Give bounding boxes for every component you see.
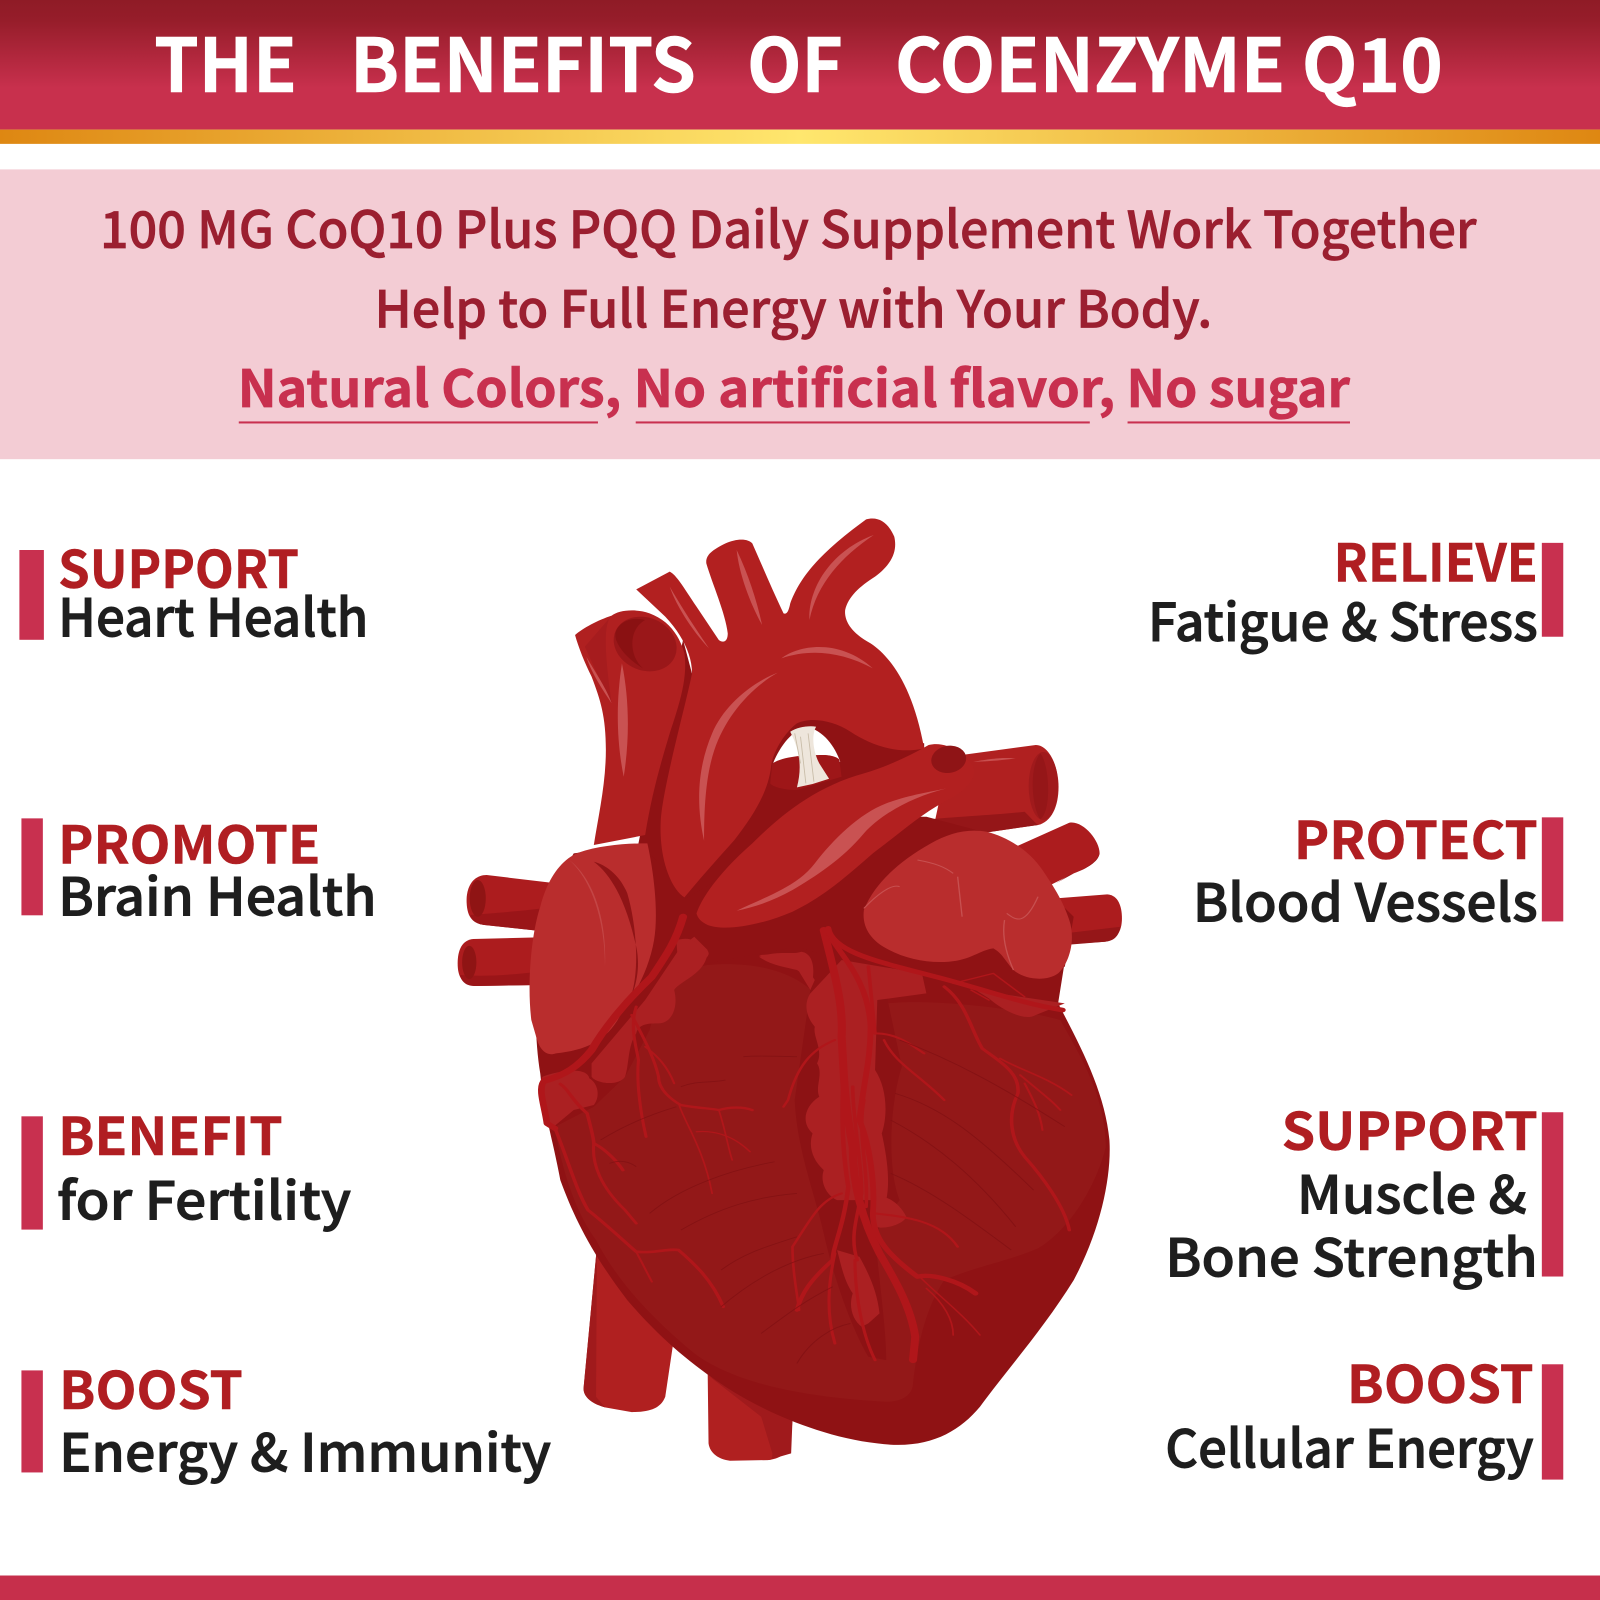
benefit: boost cellular energy: BOOST [1347, 1343, 1534, 1418]
panel: intro text [0, 169, 1600, 459]
right coronary artery [541, 917, 752, 1307]
inferior vena cava [584, 1247, 674, 1412]
left pulmonary veins [458, 875, 551, 986]
icon: anatomical heart [458, 519, 1122, 1461]
benefit: support muscle and bone strength: Muscle & [1297, 1153, 1527, 1228]
benefit: boost energy and immunity: BOOST [59, 1349, 243, 1424]
left coronary artery [828, 928, 1071, 1230]
benefit: relieve fatigue and stress: RELIEVE [1334, 522, 1538, 597]
benefit: support muscle and bone strength [1165, 1090, 1563, 1292]
benefit: protect blood vessels: PROTECT [1294, 799, 1538, 874]
benefit: boost cellular energy: Cellular Energy [1165, 1407, 1534, 1482]
claims line with underlines: Natural Colors, [238, 348, 621, 422]
benefit: protect blood vessels [1193, 799, 1563, 936]
claims line with underlines [238, 348, 1351, 423]
benefit: support heart health [19, 528, 368, 652]
claims line with underlines: No artificial flavor, [634, 348, 1115, 422]
claims line with underlines: No sugar [1127, 348, 1351, 422]
left atrium [864, 831, 1072, 979]
ventricle muscle panel [555, 964, 1106, 1402]
title: THE [154, 7, 297, 114]
benefit: support muscle and bone strength: SUPPORT [1282, 1090, 1538, 1165]
white gap under the aortic arch [772, 727, 840, 765]
benefit: boost energy and immunity [21, 1349, 551, 1486]
intro line 2: Help to Full Energy with Your Body. [374, 269, 1212, 343]
benefit: promote brain health [21, 803, 377, 930]
fat near top centre [676, 939, 813, 980]
benefit: boost cellular energy [1165, 1343, 1563, 1482]
dark back panel around arch [638, 640, 924, 900]
benefit: support heart health: SUPPORT [58, 528, 299, 603]
aortic arch and branches [636, 519, 924, 897]
benefit: boost energy and immunity: Energy & Immunity [59, 1411, 551, 1486]
title: OF [747, 7, 843, 114]
right atrium [530, 843, 656, 1054]
title: COENZYME Q10 [895, 7, 1443, 114]
ventricle body [535, 877, 1110, 1445]
descending aorta [708, 1370, 792, 1461]
benefit: relieve fatigue and stress [1148, 522, 1563, 656]
benefit: promote brain health: Brain Health [58, 855, 377, 930]
pulmonary artery behind [770, 755, 842, 790]
septum groove shadow [795, 990, 902, 1360]
benefit: protect blood vessels: Blood Vessels [1193, 861, 1538, 936]
title: BENEFITS [350, 7, 696, 114]
footer bar [0, 1576, 1600, 1600]
pulmonary trunk [696, 741, 974, 928]
right pulmonary vessels [924, 745, 1122, 945]
benefit: benefit for fertility: for Fertility [57, 1159, 351, 1234]
benefit: promote brain health: PROMOTE [58, 803, 320, 878]
ligament [790, 726, 829, 787]
superior vena cava [575, 610, 687, 845]
benefit: support heart health: Heart Health [58, 577, 368, 652]
intro line 1: 100 MG CoQ10 Plus PQQ Daily Supplement Work Together [100, 189, 1477, 263]
benefit: benefit for fertility [21, 1095, 351, 1234]
fat deposits [540, 937, 1065, 1327]
dark upper base [542, 817, 1074, 1000]
benefit: support muscle and bone strength: Bone Strength [1165, 1217, 1538, 1292]
benefit: relieve fatigue and stress: Fatigue & Stress [1148, 581, 1538, 656]
central coronary artery [784, 930, 980, 1360]
benefit: benefit for fertility: BENEFIT [58, 1095, 283, 1170]
muscle striations [601, 1040, 1065, 1363]
title banner [0, 0, 1600, 144]
